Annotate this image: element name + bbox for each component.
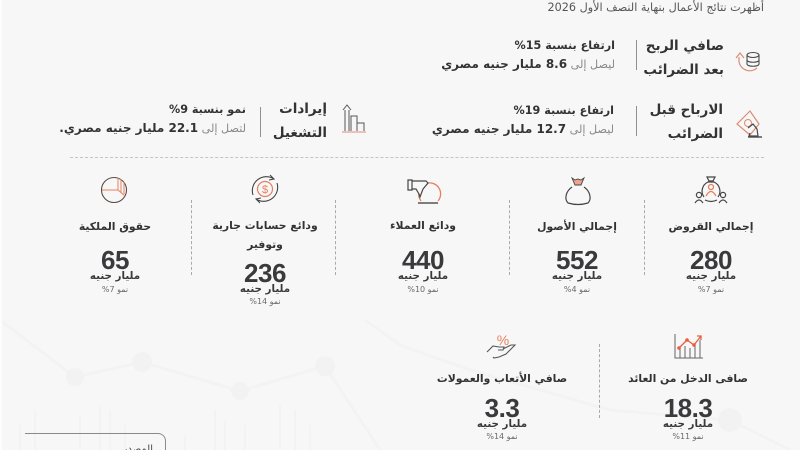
text: operating revenue value: نمو بنسبة 9%	[169, 103, 246, 116]
label: وتوفير	[247, 238, 283, 251]
heading: profit before tax	[650, 102, 723, 142]
icon: rising bars	[342, 104, 366, 132]
icon: money sack	[565, 176, 591, 206]
text: profit before tax value: ارتفاع بنسبة 19%	[514, 104, 614, 117]
divider	[599, 344, 600, 418]
label: صافي الأتعاب والعمولات	[437, 372, 567, 385]
label: ودائع العملاء	[390, 219, 456, 232]
heading: operating revenue	[273, 101, 327, 141]
metric: net fees and commissions	[437, 332, 567, 442]
icon: coins with arrow	[736, 52, 760, 72]
value: 18.3	[664, 393, 712, 423]
divider	[644, 200, 645, 275]
value: 236	[244, 258, 286, 288]
metric: total loans	[668, 176, 754, 294]
panel: profit before tax	[432, 102, 762, 142]
divider	[335, 200, 336, 275]
heading: net profit: بعد الضرائب	[643, 62, 724, 78]
icon: people and bag	[694, 176, 728, 204]
metric: total assets	[537, 176, 617, 294]
label: ودائع حسابات جارية	[212, 219, 318, 232]
unit: مليار جنيه	[552, 270, 602, 282]
icon: line and bar chart	[674, 334, 703, 358]
value: 440	[402, 245, 444, 275]
icon: dollar cycle: $	[262, 184, 268, 196]
text: profit before tax value: ليصل إلى 12.7 مليار جنيه مصري	[432, 122, 614, 136]
value: 280	[690, 245, 732, 275]
divider	[191, 200, 192, 275]
icon: dollar cycle	[252, 174, 278, 204]
unit: مليار جنيه	[663, 418, 713, 430]
unit: مليار جنيه	[477, 418, 527, 430]
unit: مليار جنيه	[240, 283, 290, 295]
label: حقوق الملكية	[79, 220, 151, 233]
growth: نمو 7%	[102, 285, 128, 294]
value: 552	[556, 245, 598, 275]
growth: نمو 11%	[672, 432, 704, 441]
metric: current and savings deposits	[212, 174, 318, 306]
value: 65	[101, 245, 129, 275]
text: net profit value	[441, 39, 615, 71]
heading: operating revenue: التشغيل	[273, 125, 327, 141]
icon: pie chart	[100, 177, 128, 203]
metric: net interest income	[628, 334, 748, 442]
divider	[260, 107, 261, 137]
growth: نمو 10%	[407, 285, 439, 294]
icon: hand with coin	[407, 179, 442, 204]
text: operating revenue value: لتصل إلى 22.1 مليار جنيه مصري.	[59, 121, 246, 135]
icon: percent on hand	[486, 332, 516, 359]
icon: percent on hand: %	[497, 332, 509, 348]
growth: نمو 4%	[564, 285, 590, 294]
text: operating revenue value	[59, 103, 246, 135]
text: net profit value: ليصل إلى 8.6 مليار جنيه مصري	[441, 57, 615, 71]
value: 3.3	[485, 393, 519, 423]
label: صافى الدخل من العائد	[628, 372, 748, 385]
unit: مليار جنيه	[686, 270, 736, 282]
left edge strip	[0, 0, 2, 450]
label: إجمالي القروض	[668, 220, 754, 233]
text: net profit value: ارتفاع بنسبة 15%	[515, 39, 615, 52]
growth: نمو 7%	[698, 285, 724, 294]
text: profit before tax value	[432, 104, 614, 136]
cropped source box	[25, 433, 166, 450]
metric: equity	[79, 177, 151, 294]
divider	[636, 40, 637, 70]
heading: net profit	[643, 38, 724, 78]
heading: profit before tax: الارباح قبل	[650, 102, 723, 118]
unit: مليار جنيه	[90, 270, 140, 282]
heading: net profit: صافي الربح	[646, 38, 724, 54]
growth: نمو 14%	[486, 432, 518, 441]
growth: نمو 14%	[249, 297, 281, 306]
heading: operating revenue: إيرادات	[279, 101, 327, 117]
panel: operating revenue	[59, 101, 366, 141]
panel: net profit after tax	[441, 38, 760, 78]
heading: profit before tax: الضرائب	[668, 126, 723, 142]
label	[212, 219, 318, 251]
unit: مليار جنيه	[398, 270, 448, 282]
title: أظهرت نتائج الأعمال بنهاية النصف الأول 2026	[548, 1, 764, 14]
divider	[509, 200, 510, 275]
label: إجمالي الأصول	[537, 220, 617, 233]
icon: money in hand	[736, 110, 762, 138]
metric: customer deposits	[390, 179, 456, 294]
divider line	[70, 157, 764, 158]
divider	[636, 106, 637, 136]
